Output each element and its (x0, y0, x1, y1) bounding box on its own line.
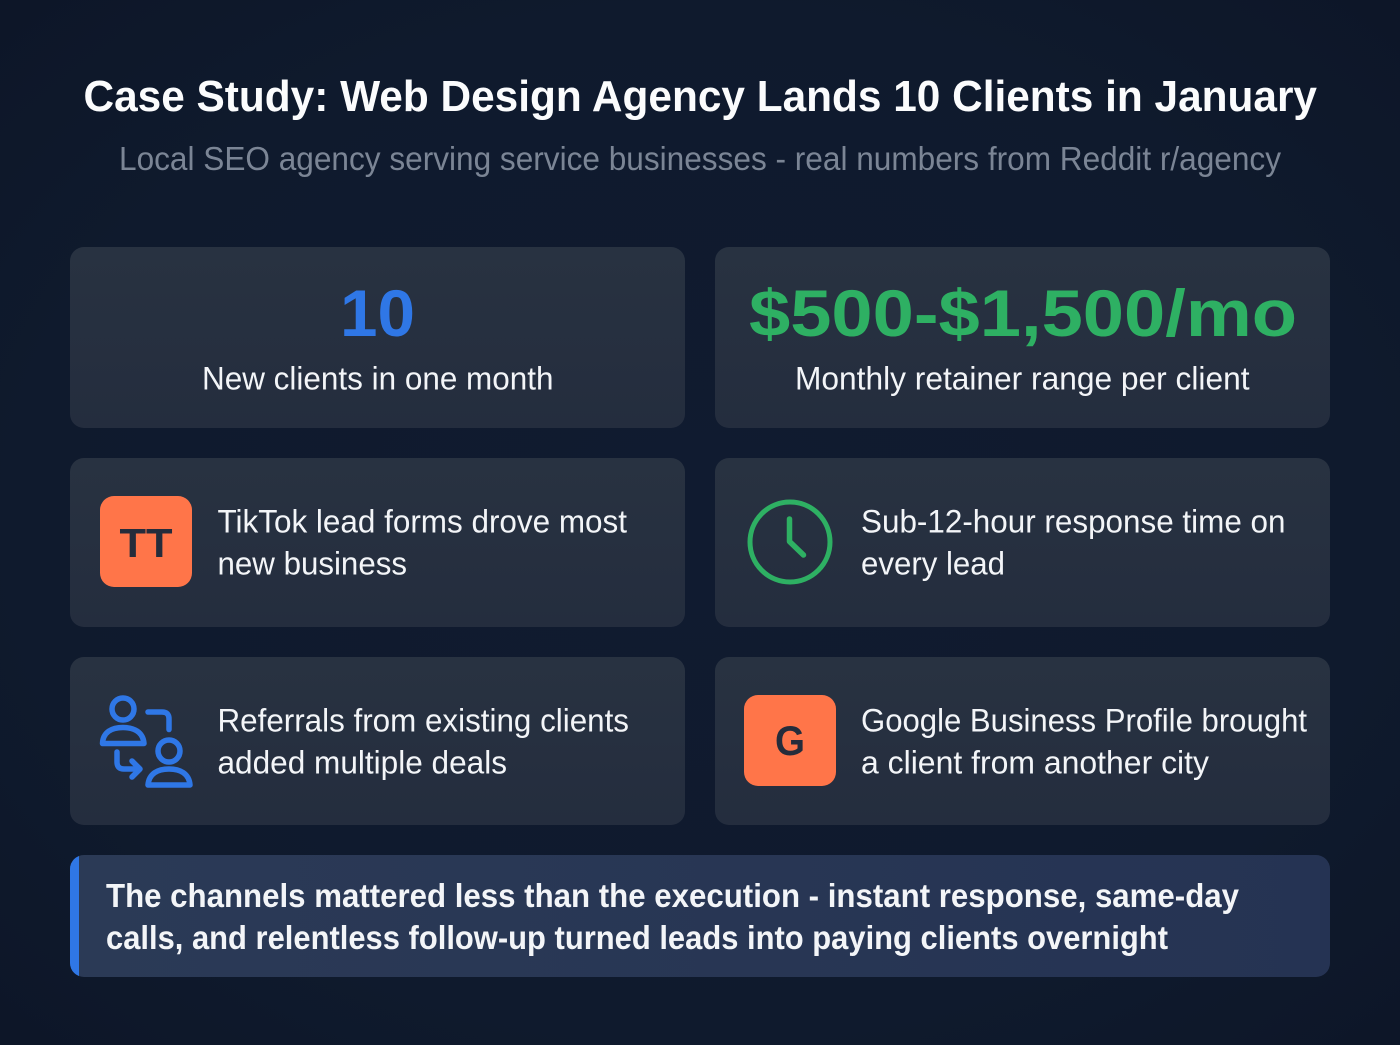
stat: 10 clients: 10 (340, 276, 415, 350)
subtitle: Local SEO agency serving service businesses - real numbers from Reddit r/agency (119, 140, 1281, 177)
text: referrals (218, 702, 629, 780)
text: Google (861, 702, 1307, 780)
icon: TikTok badge: TT (120, 520, 172, 566)
icon: Google badge (744, 695, 836, 786)
panel: retainer stat (715, 247, 1330, 428)
callout text (106, 877, 1240, 956)
icon: clock (750, 502, 830, 582)
stat caption: new clients: New clients in one month (202, 360, 554, 396)
callout text: The channels mattered less than the execution - instant response, same-day (106, 877, 1240, 914)
stat caption: retainer: Monthly retainer range per client (795, 360, 1250, 396)
text: TikTok (218, 504, 627, 582)
panel: new clients stat (70, 247, 685, 428)
stat: retainer range: $500-$1,500/mo (749, 276, 1297, 350)
text: TikTok: new business (218, 546, 407, 582)
text: TikTok: TikTok lead forms drove most (218, 504, 627, 540)
title: Case Study: Web Design Agency Lands 10 Clients in January (84, 72, 1318, 121)
panel: Google Business Profile (715, 657, 1330, 825)
callout (70, 855, 1330, 977)
panel: referrals (70, 657, 685, 825)
icon: referral people (102, 698, 190, 785)
panel: response time (715, 458, 1330, 627)
icon: TikTok badge (100, 496, 192, 587)
text: response time: every lead (861, 546, 1005, 582)
text: referrals: Referrals from existing clients (218, 702, 629, 738)
text: response time: Sub-12-hour response time on (861, 504, 1286, 540)
callout text: calls, and relentless follow-up turned leads into paying clients overnight (106, 919, 1168, 956)
text: response time (861, 504, 1286, 582)
icon: Google badge: G (775, 717, 805, 764)
text: Google: a client from another city (861, 744, 1210, 780)
text: referrals: added multiple deals (218, 744, 507, 780)
panel: TikTok lead forms (70, 458, 685, 627)
text: Google: Google Business Profile brought (861, 702, 1307, 738)
